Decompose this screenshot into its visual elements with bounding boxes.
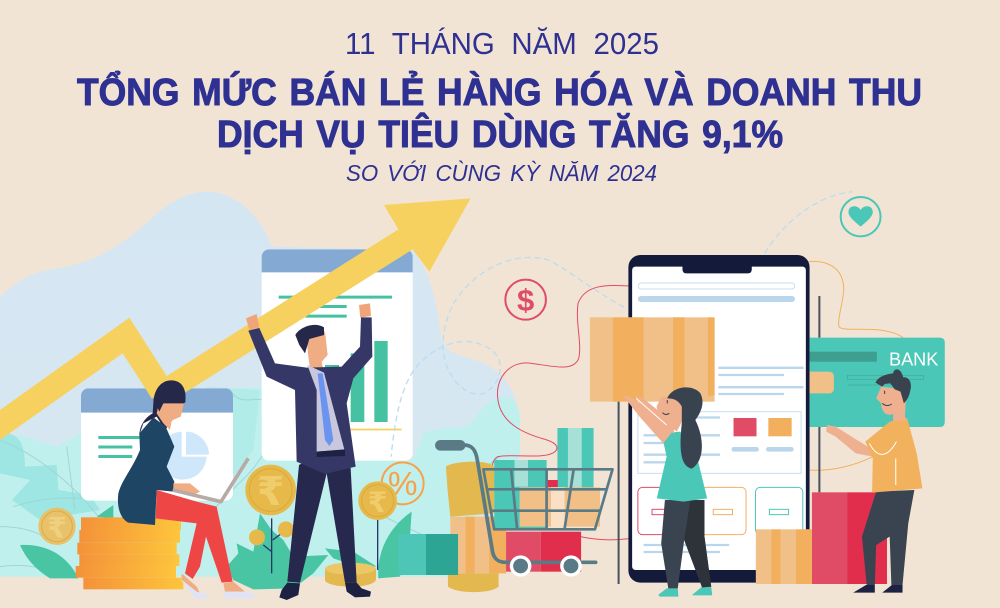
coin right: ₹: [368, 487, 388, 519]
button teal: [755, 487, 803, 535]
text lines: [644, 368, 803, 552]
dollar badge: [505, 280, 546, 320]
stack of orange books: [76, 517, 183, 589]
cart wheel left: [511, 557, 530, 575]
woman pants: [156, 490, 233, 583]
title block: [77, 26, 922, 186]
headline line 2: DỊCH VỤ TIÊU DÙNG TĂNG 9,1%: [217, 112, 783, 156]
shoes: [853, 584, 903, 593]
teal box: [398, 534, 458, 575]
card header: [81, 388, 233, 413]
man neck and face: [306, 332, 328, 370]
man fists: [246, 303, 371, 330]
plant behind stack: [97, 505, 113, 518]
product panel: [638, 412, 801, 473]
man holding card: [826, 369, 922, 593]
woman shoes: [180, 578, 256, 599]
orange swatch: [768, 418, 792, 436]
plant right: [378, 512, 412, 578]
red item: [547, 480, 558, 487]
gold coin stack under man: [325, 563, 376, 587]
man shirt: [307, 365, 344, 452]
coin stack and box by cart: [446, 462, 506, 592]
heart badge: [841, 197, 881, 236]
blue bar: [638, 296, 795, 302]
coin small left: [249, 529, 265, 545]
man celebrating: [246, 303, 372, 600]
dashed connection lines: [391, 192, 852, 457]
foliage veins: [0, 390, 500, 573]
face and neck: [876, 387, 907, 422]
smartphone: [628, 255, 810, 583]
chart baseline: [347, 427, 402, 432]
box stripes: [465, 517, 506, 573]
woman hand: [173, 483, 200, 495]
darker mint leaves: [0, 433, 100, 520]
small parcel: [756, 529, 812, 584]
orange parcel in cart: [520, 487, 600, 527]
percent badge: [382, 462, 424, 504]
man hair: [295, 325, 324, 353]
percent badge: %: [388, 466, 417, 503]
coin large: ₹: [257, 470, 285, 514]
dollar badge: $: [517, 283, 534, 318]
large report card: [262, 249, 413, 461]
red parcel: [812, 492, 887, 584]
stack coins: [446, 462, 494, 517]
shirt detail: [869, 442, 896, 485]
woman hair back: [139, 380, 186, 435]
card stripe: [810, 352, 877, 362]
red swatch: [734, 418, 757, 436]
arm: [826, 425, 873, 457]
tunic: [657, 432, 707, 502]
hair: [875, 369, 911, 403]
woman eye and smile: [663, 400, 669, 415]
plant center: [227, 513, 328, 589]
subtitle: period: 11 THÁNG NĂM 2025: [345, 26, 659, 61]
woman hair fringe: [155, 390, 185, 412]
long hair: [667, 387, 703, 469]
man belt: [317, 450, 345, 457]
coin left: [38, 508, 76, 545]
man eye and smile: [882, 391, 892, 406]
woman with laptop: [118, 380, 256, 599]
card header: [262, 249, 413, 272]
large parcel: [590, 317, 715, 402]
woman feet: [182, 573, 245, 593]
man trousers: [287, 455, 357, 583]
trouser shade: [684, 500, 711, 587]
raised arms: [623, 395, 675, 443]
rising yellow arrow: [0, 198, 471, 440]
darker mint leaf right: [207, 387, 260, 477]
arm highlight: [636, 398, 667, 425]
text lines: [98, 437, 140, 456]
orange curve: [809, 261, 903, 470]
phone screen: [632, 267, 806, 570]
red curve: [492, 285, 629, 540]
red box under cart: [506, 532, 581, 572]
woman neck and face: [157, 403, 184, 430]
stack box: [450, 517, 506, 573]
shirt: [865, 418, 922, 493]
right illustration: online shopping scene: [391, 192, 945, 597]
background blue blob: [0, 192, 520, 577]
card chip: [810, 372, 834, 393]
woman top: [118, 417, 174, 525]
coin right: [358, 481, 397, 520]
shoes: [658, 587, 712, 597]
plant right small: [325, 548, 377, 567]
card label: BANK: [889, 349, 939, 370]
left illustration: growth scene: [0, 192, 520, 600]
card body: [810, 338, 945, 427]
headline line 1: TỔNG MỨC BÁN LẺ HÀNG HÓA VÀ DOANH THU: [77, 69, 922, 114]
bank card: [810, 338, 945, 427]
trousers: [661, 500, 711, 588]
swatch captions: [734, 442, 791, 456]
laptop: [173, 458, 248, 502]
gold coins: [38, 465, 397, 545]
small report card: [81, 388, 233, 501]
card body: [81, 388, 233, 501]
woman lifting parcel: [623, 387, 712, 597]
search bar: [638, 283, 795, 289]
card body: [262, 249, 413, 461]
button red: [638, 487, 687, 535]
support pole left: [618, 400, 620, 584]
tall teal goods: [557, 428, 594, 488]
coin small right: [278, 521, 294, 537]
bar chart: [325, 341, 388, 422]
trousers: [862, 490, 914, 585]
face: [656, 397, 683, 432]
man jacket and arms: [248, 317, 372, 474]
short teal goods: [494, 460, 547, 528]
teal box edge: [430, 534, 458, 575]
man tie: [318, 373, 333, 446]
support pole right: [816, 296, 822, 492]
comparison note: SO VỚI CÙNG KỲ NĂM 2024: [346, 160, 657, 186]
card number lines: [847, 375, 923, 385]
man shoes: [279, 583, 371, 600]
cart wheel right: [562, 557, 580, 575]
coin large: [245, 465, 296, 515]
base coins: [448, 573, 499, 592]
text lines: [279, 297, 392, 316]
plant left: [20, 545, 78, 578]
pie chart: [159, 432, 209, 480]
mint foliage backdrop: [0, 387, 520, 577]
coin left: ₹: [47, 512, 67, 544]
green plants: [20, 505, 412, 589]
shopping cart: [435, 428, 613, 575]
phone notch: [682, 266, 752, 273]
cart handle and frame: [464, 445, 596, 562]
cart basket: [483, 469, 613, 529]
cart grip: [435, 440, 465, 451]
plant stems: [263, 518, 378, 573]
phone body: [628, 255, 810, 583]
button orange: [697, 487, 746, 535]
